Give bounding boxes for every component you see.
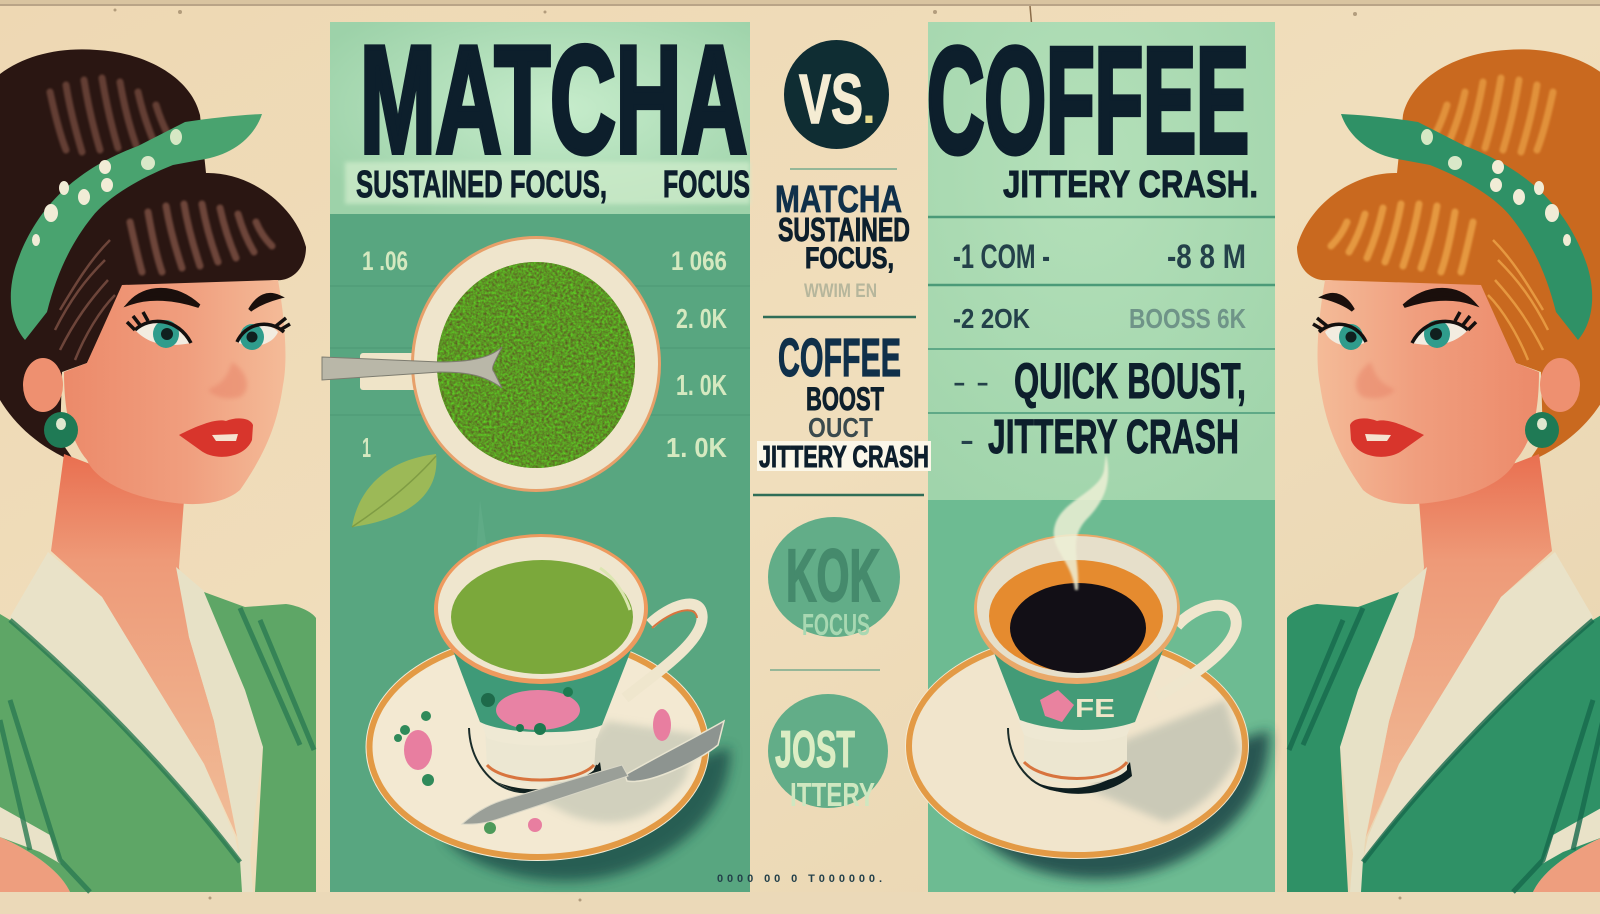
badge: vs: . [862, 78, 876, 134]
headband [11, 114, 262, 340]
eye right [237, 318, 290, 350]
coffee figures: -2 2OK [953, 303, 1030, 334]
lips [179, 418, 253, 457]
badge: focus [768, 517, 900, 642]
matcha figures: 1. 0K [676, 370, 727, 402]
matcha subtitle: SUSTAINED FOCUS, [356, 164, 607, 206]
coffee subtitle: JITTERY CRASH. [1003, 164, 1258, 206]
bowl tab [360, 353, 420, 390]
icon: knife [462, 721, 724, 824]
chest and neck [51, 454, 237, 837]
earring [44, 412, 78, 448]
matcha figures: 1 [362, 432, 371, 463]
coffee figures [953, 238, 1246, 464]
badge: focus: KOK [786, 534, 880, 617]
center comparison: coffee text [753, 328, 931, 495]
saucer [366, 633, 710, 861]
woman: red hair [1287, 49, 1600, 892]
cup handle [1157, 605, 1236, 697]
center comparison: matcha text: SUSTAINED [778, 211, 910, 248]
hair highlights [50, 78, 170, 152]
spoon [322, 347, 502, 388]
matcha powder [437, 262, 635, 468]
coffee figures: - [960, 425, 974, 455]
matcha figures: 1 .06 [362, 246, 408, 276]
cup floral [496, 690, 580, 730]
saucer shadow [444, 747, 730, 881]
saucer flowers [394, 709, 671, 834]
center comparison: coffee text: OUCT [808, 412, 873, 443]
icon: steam [1054, 454, 1108, 590]
cup rim [974, 534, 1180, 684]
matcha figures: 1. 0K [666, 432, 727, 463]
center comparison: coffee text: BOOST [806, 381, 884, 417]
saucer [905, 633, 1249, 859]
footer microprint: 0000 00 0 T000000. [717, 873, 882, 885]
matcha figures: 1 066 [671, 246, 727, 276]
hair [0, 49, 306, 462]
center comparison: coffee text: COFFEE [778, 328, 901, 388]
nose [208, 362, 247, 398]
matcha subtitle: FOCUS [663, 164, 750, 206]
illustration: matcha bowl [322, 236, 661, 492]
collar right [176, 567, 263, 892]
tea [451, 560, 633, 674]
icon: leaf [352, 454, 436, 527]
illustration: coffee cup [905, 534, 1269, 879]
center comparison: matcha text: WWIM EN [804, 281, 877, 302]
cup handle [625, 604, 702, 698]
coffee crema [989, 560, 1163, 672]
panel: matcha [330, 22, 750, 892]
center comparison: matcha text: MATCHA [775, 179, 902, 221]
title: coffee: COFFEE [927, 16, 1249, 184]
woman: dark hair [0, 49, 316, 892]
bowl [411, 236, 661, 492]
badge: vs [784, 40, 889, 149]
cup body [449, 640, 635, 746]
matcha figures [362, 246, 727, 463]
illustration: matcha cup [366, 534, 730, 881]
cup rim [434, 534, 648, 684]
paper wear specks [114, 8, 1402, 902]
panel: coffee [928, 22, 1275, 892]
matcha header background [330, 22, 750, 214]
brows [130, 290, 279, 310]
coffee figures: -1 COM - [953, 238, 1050, 276]
dress folds [0, 608, 314, 892]
badge: vs: VS [799, 60, 863, 138]
shoulder [0, 837, 70, 892]
badge: boost: JOST [775, 721, 855, 779]
saucer shadow [973, 730, 1269, 879]
face [64, 280, 285, 504]
center comparison: matcha text [763, 169, 916, 317]
coffee figures: BOOSS 6K [1129, 303, 1246, 334]
center comparison: matcha text: FOCUS, [805, 242, 894, 275]
cup foot [469, 728, 597, 793]
matcha figures: 2. 0K [676, 303, 727, 334]
coffee lower background [928, 500, 1275, 892]
coffee header background [928, 22, 1275, 500]
matcha lower background [330, 214, 750, 892]
coffee [1010, 583, 1146, 673]
cup foot [1008, 728, 1127, 791]
ear [23, 358, 63, 412]
badge: boost [768, 694, 888, 813]
dress [0, 592, 316, 892]
badge: boost: ITTERY [790, 776, 875, 813]
cup label: FE [1075, 693, 1115, 723]
coffee figures: - - [953, 370, 989, 395]
badge: focus: FOCUS [802, 607, 870, 642]
center comparison: coffee text: JITTERY CRASH [759, 439, 929, 474]
title: matcha: MATCHA [360, 15, 747, 185]
eye left [127, 312, 191, 348]
coffee figures: JITTERY CRASH [988, 411, 1239, 464]
collar left [10, 552, 240, 860]
cup label [1040, 690, 1115, 723]
coffee figures: -8 8 M [1167, 238, 1246, 276]
cup body [989, 640, 1167, 742]
coffee figures: QUICK BOUST, [1014, 353, 1246, 409]
